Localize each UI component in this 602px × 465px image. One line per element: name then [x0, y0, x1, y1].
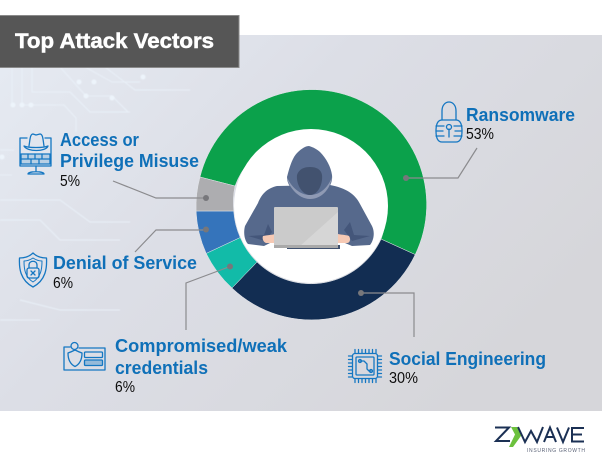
leader line: ransomware [406, 148, 477, 178]
label: denial of service: Denial of Service [53, 253, 197, 273]
label: denial of service [19, 253, 197, 292]
logo: zywave: INSURING GROWTH [527, 448, 585, 454]
leader dots [203, 175, 409, 296]
label: denial of service: 6% [53, 275, 73, 292]
leader line: social engineering [361, 293, 414, 337]
label: compromised credentials: 6% [115, 379, 135, 396]
label: access or privilege misuse: Privilege Misuse [60, 151, 199, 171]
leader line: compromised [186, 266, 230, 330]
label: access or privilege misuse: Access or [60, 130, 139, 150]
label: access or privilege misuse: 5% [60, 173, 80, 190]
label: social engineering: 30% [389, 370, 418, 387]
label: compromised credentials: Compromised/weak [115, 336, 288, 356]
label: social engineering [348, 349, 546, 387]
title: Top Attack Vectors [15, 30, 214, 53]
label: ransomware [436, 102, 575, 143]
label: ransomware: 53% [466, 126, 494, 143]
leader line: denial of service [135, 230, 206, 252]
icon: hat monitor [20, 134, 51, 174]
segment: compromised credentials 6% [206, 238, 257, 288]
label: compromised credentials: credentials [115, 358, 208, 378]
title [0, 16, 239, 68]
icon: shield lock [19, 253, 47, 287]
icon: chip [348, 350, 382, 382]
hacker illustration [244, 146, 374, 249]
centre circle [234, 129, 388, 283]
logo: zywave [495, 427, 585, 454]
segment: ransomware 53% [200, 90, 427, 255]
label: compromised credentials [64, 336, 288, 396]
label: ransomware: Ransomware [466, 105, 575, 125]
label: access or privilege misuse [20, 130, 199, 190]
segment: social engineering 30% [232, 239, 415, 320]
icon: id card [64, 342, 105, 370]
donut chart [196, 90, 427, 320]
segment: access or privilege misuse 5% [196, 177, 235, 211]
icon: padlock [436, 102, 462, 142]
label: social engineering: Social Engineering [389, 349, 546, 369]
segment: denial of service 6% [196, 211, 240, 253]
leader line: access [113, 181, 206, 198]
